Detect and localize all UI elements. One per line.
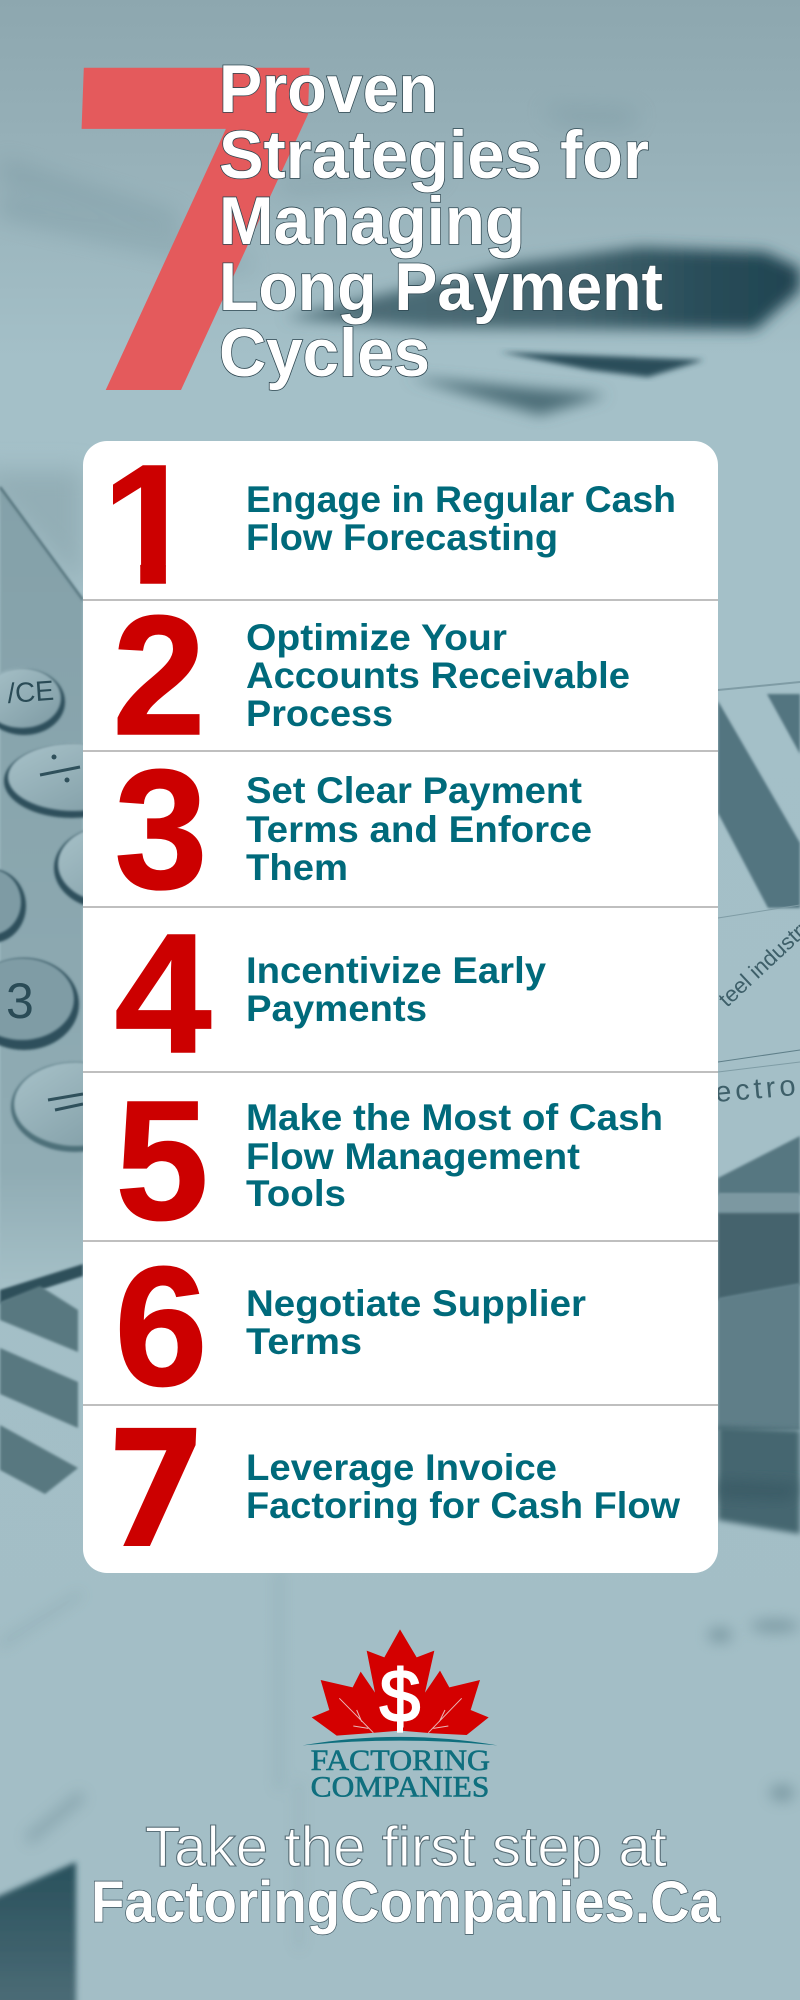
photo: calculator with keys — [0, 470, 166, 1292]
photo: calculator with keys: /CE — [6, 675, 55, 709]
strategy 1: Engage in Regular Cash — [246, 479, 676, 520]
title — [219, 51, 663, 391]
strategy 4: Payments — [246, 988, 427, 1029]
strategy 7: Factoring for Cash Flow — [246, 1485, 680, 1526]
title: Long Payment — [219, 249, 663, 325]
strategy 5 — [116, 1066, 663, 1256]
strategy 6: Terms — [246, 1321, 362, 1362]
strategy 2: Optimize Your — [246, 617, 507, 658]
strategy 5: 5 — [116, 1066, 208, 1256]
logo wordmark: FACTORING — [311, 1744, 490, 1777]
footer call to action — [91, 1815, 721, 1935]
strategy 3: 3 — [114, 735, 208, 925]
title: Managing — [219, 183, 525, 259]
photo: chart stripes lower left — [0, 1264, 83, 1494]
photo: chart and report lower right — [713, 682, 800, 1534]
panel: strategies list — [83, 430, 718, 1585]
strategy 1: 1 — [102, 430, 197, 620]
strategy 3 — [114, 735, 592, 925]
swoosh — [303, 1737, 497, 1745]
strategy 6: Negotiate Supplier — [246, 1283, 586, 1324]
strategy 7: 7 — [100, 1397, 209, 1585]
strategy 2: Process — [246, 693, 393, 734]
title: Strategies for — [219, 117, 649, 193]
strategy 2 — [112, 581, 630, 771]
strategy 7: Leverage Invoice — [246, 1447, 557, 1488]
strategy 4 — [114, 899, 546, 1089]
logo wordmark — [311, 1744, 490, 1804]
photo: blurred pen on paper — [0, 108, 800, 415]
strategy 3: Terms and Enforce — [246, 809, 592, 850]
strategy 4: Incentivize Early — [246, 950, 546, 991]
strategy 1 — [102, 430, 676, 620]
strategy 3: Them — [246, 847, 348, 888]
footer call to action: Take the first step at — [145, 1815, 667, 1879]
strategy 5: Make the Most of Cash — [246, 1097, 663, 1138]
strategy 7 — [100, 1397, 680, 1585]
strategy 1: Flow Forecasting — [246, 517, 558, 558]
strategy 2: 2 — [112, 581, 206, 771]
strategy 6: 6 — [114, 1232, 208, 1422]
strategy 5: Flow Management — [246, 1136, 580, 1177]
photo: faint marks near footer — [0, 1570, 799, 1950]
strategy 5: Tools — [246, 1173, 346, 1214]
icon: maple leaf — [312, 1629, 489, 1736]
photo: calculator with keys: 3 — [6, 973, 34, 1029]
strategy 6 — [114, 1232, 586, 1422]
strategy 4: 4 — [114, 899, 212, 1089]
title: Cycles — [219, 315, 430, 391]
title: Proven — [219, 51, 438, 127]
footer call to action: FactoringCompanies.Ca — [91, 1870, 721, 1935]
strategy 3: Set Clear Payment — [246, 770, 582, 811]
logo: Factoring Companies maple leaf — [303, 1629, 497, 1804]
logo wordmark: COMPANIES — [311, 1771, 489, 1804]
photo: dark wedge bottom left — [0, 1862, 76, 2000]
strategy 2: Accounts Receivable — [246, 655, 630, 696]
icon: dollar sign: $ — [380, 1655, 420, 1738]
